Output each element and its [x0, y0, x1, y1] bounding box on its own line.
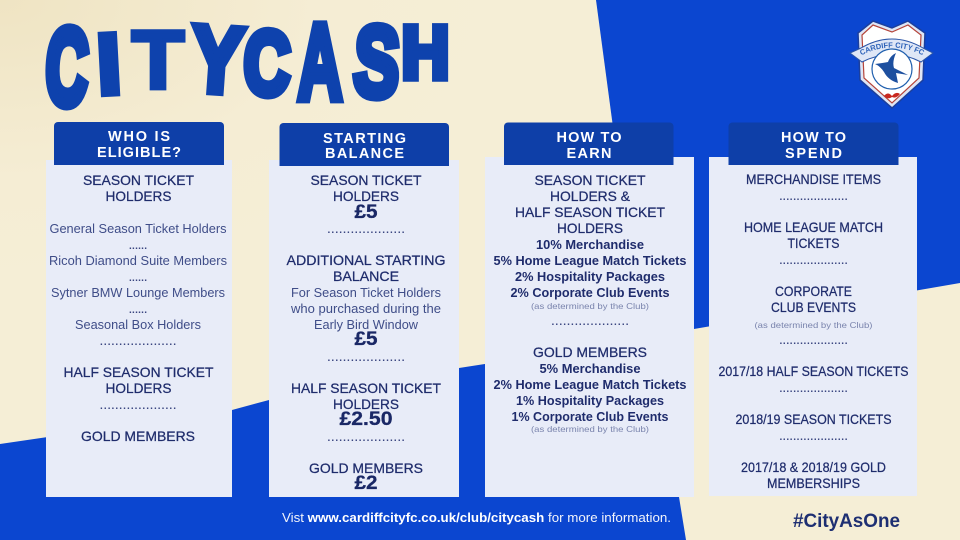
spending options list: (as determined by the Club): [754, 320, 873, 330]
eligibility list: SEASON TICKET: [83, 172, 194, 188]
header: starting balance: [280, 123, 449, 166]
icon: club crest: CARDIFF CITY FC: [860, 42, 924, 55]
eligibility list: ......: [129, 241, 147, 252]
header: starting balance: STARTING: [323, 131, 406, 147]
header: how to earn: HOW TO: [556, 130, 622, 146]
panel: starting balance: [269, 123, 459, 497]
eligibility list: HALF SEASON TICKET: [64, 364, 214, 380]
starting balance list: £2: [354, 472, 378, 494]
earning rates list: (as determined by the Club): [531, 424, 649, 434]
header: how to spend: HOW TO: [781, 130, 846, 146]
spending options list: CLUB EVENTS: [771, 299, 856, 315]
eligibility list: ......: [129, 273, 147, 284]
panel background: [269, 160, 459, 497]
header: starting balance: BALANCE: [325, 146, 404, 162]
starting balance list: £5: [354, 328, 378, 350]
eligibility list: HOLDERS: [106, 380, 172, 396]
eligibility list: ......: [129, 305, 147, 316]
header: how to earn: EARN: [566, 146, 612, 162]
starting balance list: [286, 172, 446, 494]
panel: how to spend: [709, 122, 917, 496]
hashtag: #CityAsOne: [793, 511, 900, 532]
earning rates list: 2% Corporate Club Events: [510, 285, 670, 300]
starting balance list: ADDITIONAL STARTING: [286, 252, 446, 268]
panel: how to earn: [485, 122, 694, 497]
earning rates list: 5% Home League Match Tickets: [494, 253, 686, 268]
earning rates list: 2% Home League Match Tickets: [494, 377, 686, 392]
spending options list: 2018/19 SEASON TICKETS: [736, 411, 892, 427]
earning rates list: 10% Merchandise: [536, 237, 644, 252]
starting balance list: ....................: [328, 225, 405, 236]
eligibility list: HOLDERS: [106, 188, 172, 204]
eligibility list: Sytner BMW Lounge Members: [51, 285, 225, 300]
spending options list: [718, 171, 908, 491]
starting balance list: HOLDERS: [333, 396, 399, 412]
title: [43, 1, 449, 129]
spending options list: 2017/18 HALF SEASON TICKETS: [718, 363, 908, 379]
header: who is eligible: WHO IS: [108, 129, 170, 145]
title: C: [242, 11, 292, 114]
spending options list: ....................: [780, 432, 848, 443]
footer: website link: Vist www.cardiffcityfc.co.uk/club/citycash for more information.: [282, 510, 671, 525]
title: H: [402, 12, 449, 94]
panel: who is eligible: [46, 122, 232, 497]
header: how to earn: [504, 122, 674, 165]
title: I: [92, 12, 126, 115]
earning rates list: HALF SEASON TICKET: [515, 204, 665, 220]
spending options list: HOME LEAGUE MATCH: [744, 219, 883, 235]
panel background: [709, 157, 917, 496]
header: how to spend: SPEND: [785, 146, 842, 162]
title: T: [132, 12, 184, 106]
starting balance list: Early Bird Window: [314, 317, 419, 332]
eligibility list: Seasonal Box Holders: [75, 317, 201, 332]
starting balance list: GOLD MEMBERS: [309, 460, 423, 476]
eligibility list: ....................: [100, 337, 176, 348]
eligibility list: ....................: [100, 401, 176, 412]
starting balance list: For Season Ticket Holders: [291, 285, 441, 300]
earning rates list: [494, 172, 686, 434]
earning rates list: ....................: [552, 317, 629, 328]
title: A: [298, 1, 342, 122]
starting balance list: BALANCE: [333, 268, 399, 284]
earning rates list: 1% Hospitality Packages: [516, 393, 664, 408]
spending options list: CORPORATE: [775, 283, 852, 299]
earning rates list: 1% Corporate Club Events: [512, 409, 668, 424]
earning rates list: SEASON TICKET: [534, 172, 646, 188]
title: Y: [188, 7, 247, 114]
spending options list: ....................: [780, 336, 848, 347]
eligibility list: GOLD MEMBERS: [81, 428, 195, 444]
eligibility list: General Season Ticket Holders: [50, 221, 227, 236]
starting balance list: £5: [354, 201, 378, 223]
earning rates list: 2% Hospitality Packages: [515, 269, 665, 284]
spending options list: MERCHANDISE ITEMS: [746, 171, 881, 187]
earning rates list: 5% Merchandise: [540, 361, 640, 376]
spending options list: ....................: [780, 256, 848, 267]
spending options list: ....................: [780, 384, 848, 395]
starting balance list: HALF SEASON TICKET: [291, 380, 441, 396]
panel background: [46, 160, 232, 497]
earning rates list: (as determined by the Club): [531, 301, 649, 311]
earning rates list: HOLDERS &: [550, 188, 631, 204]
earning rates list: GOLD MEMBERS: [533, 344, 647, 360]
header: who is eligible: ELIGIBLE?: [97, 145, 181, 161]
title: S: [351, 6, 402, 119]
title: C: [43, 7, 91, 129]
spending options list: 2017/18 & 2018/19 GOLD: [741, 459, 886, 475]
spending options list: ....................: [780, 192, 848, 203]
icon: club crest: [849, 20, 934, 109]
blue diagonal shape: bottom: [0, 340, 686, 540]
eligibility list: [49, 172, 227, 444]
starting balance list: £2.50: [340, 408, 393, 430]
spending options list: TICKETS: [788, 235, 840, 251]
starting balance list: HOLDERS: [333, 188, 399, 204]
earning rates list: HOLDERS: [557, 220, 623, 236]
header: how to spend: [728, 122, 898, 165]
starting balance list: ....................: [328, 433, 405, 444]
eligibility list: Ricoh Diamond Suite Members: [49, 253, 227, 268]
spending options list: MEMBERSHIPS: [767, 475, 860, 491]
starting balance list: ....................: [328, 353, 405, 364]
header: who is eligible: [54, 122, 224, 165]
blue diagonal shape: top right: [596, 0, 960, 329]
starting balance list: SEASON TICKET: [310, 172, 422, 188]
starting balance list: who purchased during the: [290, 301, 441, 316]
panel background: [485, 157, 694, 497]
